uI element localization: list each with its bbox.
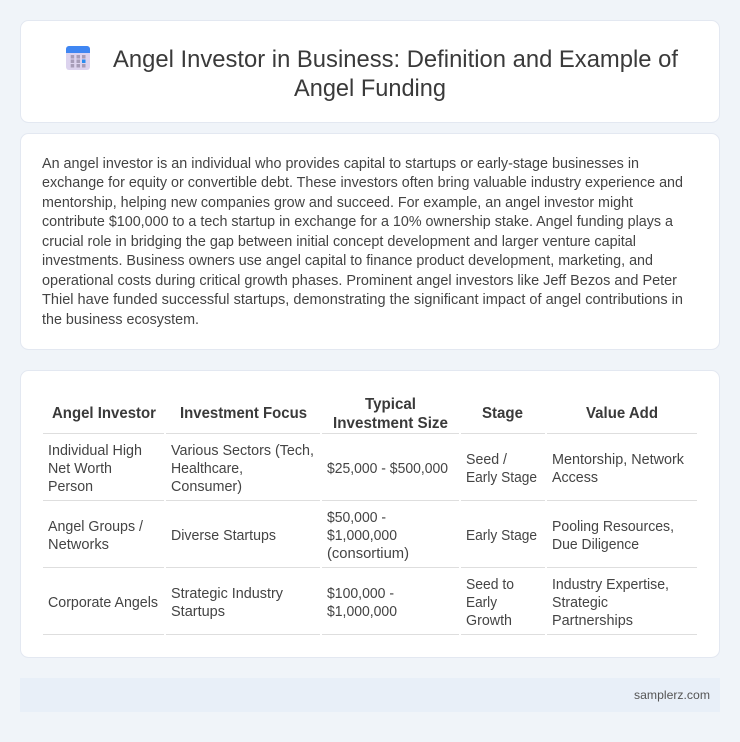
- text block: description paragraph: crucial role in bridging the gap between initial concept development and larger venture capital: [42, 234, 636, 250]
- footer bar: [20, 678, 720, 712]
- table row: corporate: Seed to: [466, 577, 514, 593]
- title: Angel Funding: [294, 75, 446, 102]
- table row lines: [43, 434, 697, 634]
- table row: individual: Person: [48, 479, 93, 495]
- text block: description paragraph: exchange for equity or convertible debt. These investors often bring valuable industry experience and: [42, 175, 683, 191]
- table header: Typical: [365, 396, 416, 413]
- text block: description paragraph: mentorship, helping new companies grow and succeed. For example, an angel investor might: [42, 195, 633, 211]
- table row: corporate: Partnerships: [552, 613, 633, 629]
- table row: corporate: Corporate Angels: [48, 595, 158, 611]
- table row: groups: [48, 510, 674, 562]
- table row: individual: Consumer): [171, 479, 242, 495]
- text block: description paragraph: An angel investor is an individual who provides capital to startups or early-stage businesses in: [42, 156, 639, 172]
- table row: corporate: Early: [466, 595, 498, 611]
- text block: description paragraph: contribute $100,000 to a tech startup in exchange for a 10% ownership stake. Angel funding plays a: [42, 214, 673, 230]
- footer text: samplerz.com: [634, 688, 710, 702]
- text block: description paragraph: Thiel have funded successful startups, demonstrating the significant impact of angel contributions in: [42, 292, 683, 308]
- panel: title card: [20, 20, 720, 122]
- panel: description: [20, 134, 720, 350]
- table row: groups: Networks: [48, 537, 109, 553]
- table row: individual: Mentorship, Network: [552, 452, 685, 468]
- table row: corporate: Strategic Industry: [171, 586, 284, 602]
- text block: description paragraph: [42, 156, 683, 328]
- table row: individual: Access: [552, 470, 598, 486]
- icon: calendar: [66, 46, 90, 70]
- table row: groups: Diverse Startups: [171, 528, 276, 544]
- table header: [52, 396, 658, 432]
- table row: individual: Early Stage: [466, 470, 537, 486]
- table row: groups: $50,000 -: [327, 510, 386, 526]
- table row: corporate: $1,000,000: [327, 604, 397, 620]
- table row: corporate: Strategic: [552, 595, 608, 611]
- table row: individual: Net Worth: [48, 461, 112, 477]
- table row: corporate: $100,000 -: [327, 586, 394, 602]
- table row: corporate: [48, 577, 669, 629]
- panel: table card: [20, 370, 720, 658]
- text block: description paragraph: the business ecosystem.: [42, 312, 199, 328]
- table row: groups: (consortium): [327, 546, 409, 562]
- title: Angel Investor in Business: Definition and Example of: [113, 46, 678, 73]
- table header: Investment Size: [333, 415, 448, 432]
- table row: corporate: Growth: [466, 613, 512, 629]
- table row: individual: Individual High: [48, 443, 142, 459]
- table row: groups: Pooling Resources,: [552, 519, 674, 535]
- table row: groups: Early Stage: [466, 528, 537, 544]
- title: [113, 46, 678, 102]
- table row: corporate: Industry Expertise,: [552, 577, 669, 593]
- table row: corporate: Startups: [171, 604, 225, 620]
- table row: individual: [48, 443, 685, 495]
- table row: individual: Healthcare,: [171, 461, 243, 477]
- table row: groups: Due Diligence: [552, 537, 639, 553]
- table row: individual: Various Sectors (Tech,: [171, 443, 314, 459]
- text block: description paragraph: investments. Business owners use angel capital to finance product development, marketing, and: [42, 253, 653, 269]
- table header: Angel Investor: [52, 405, 156, 422]
- table header: Stage: [482, 405, 523, 422]
- table row: individual: Seed /: [466, 452, 507, 468]
- table header: Value Add: [586, 405, 658, 422]
- table row: groups: Angel Groups /: [48, 519, 143, 535]
- table row: groups: $1,000,000: [327, 528, 397, 544]
- table row: individual: $25,000 - $500,000: [327, 461, 448, 477]
- table header: Investment Focus: [180, 405, 307, 422]
- text block: description paragraph: operational costs during critical growth phases. Prominent angel investors like Jeff Bezos and Peter: [42, 273, 677, 289]
